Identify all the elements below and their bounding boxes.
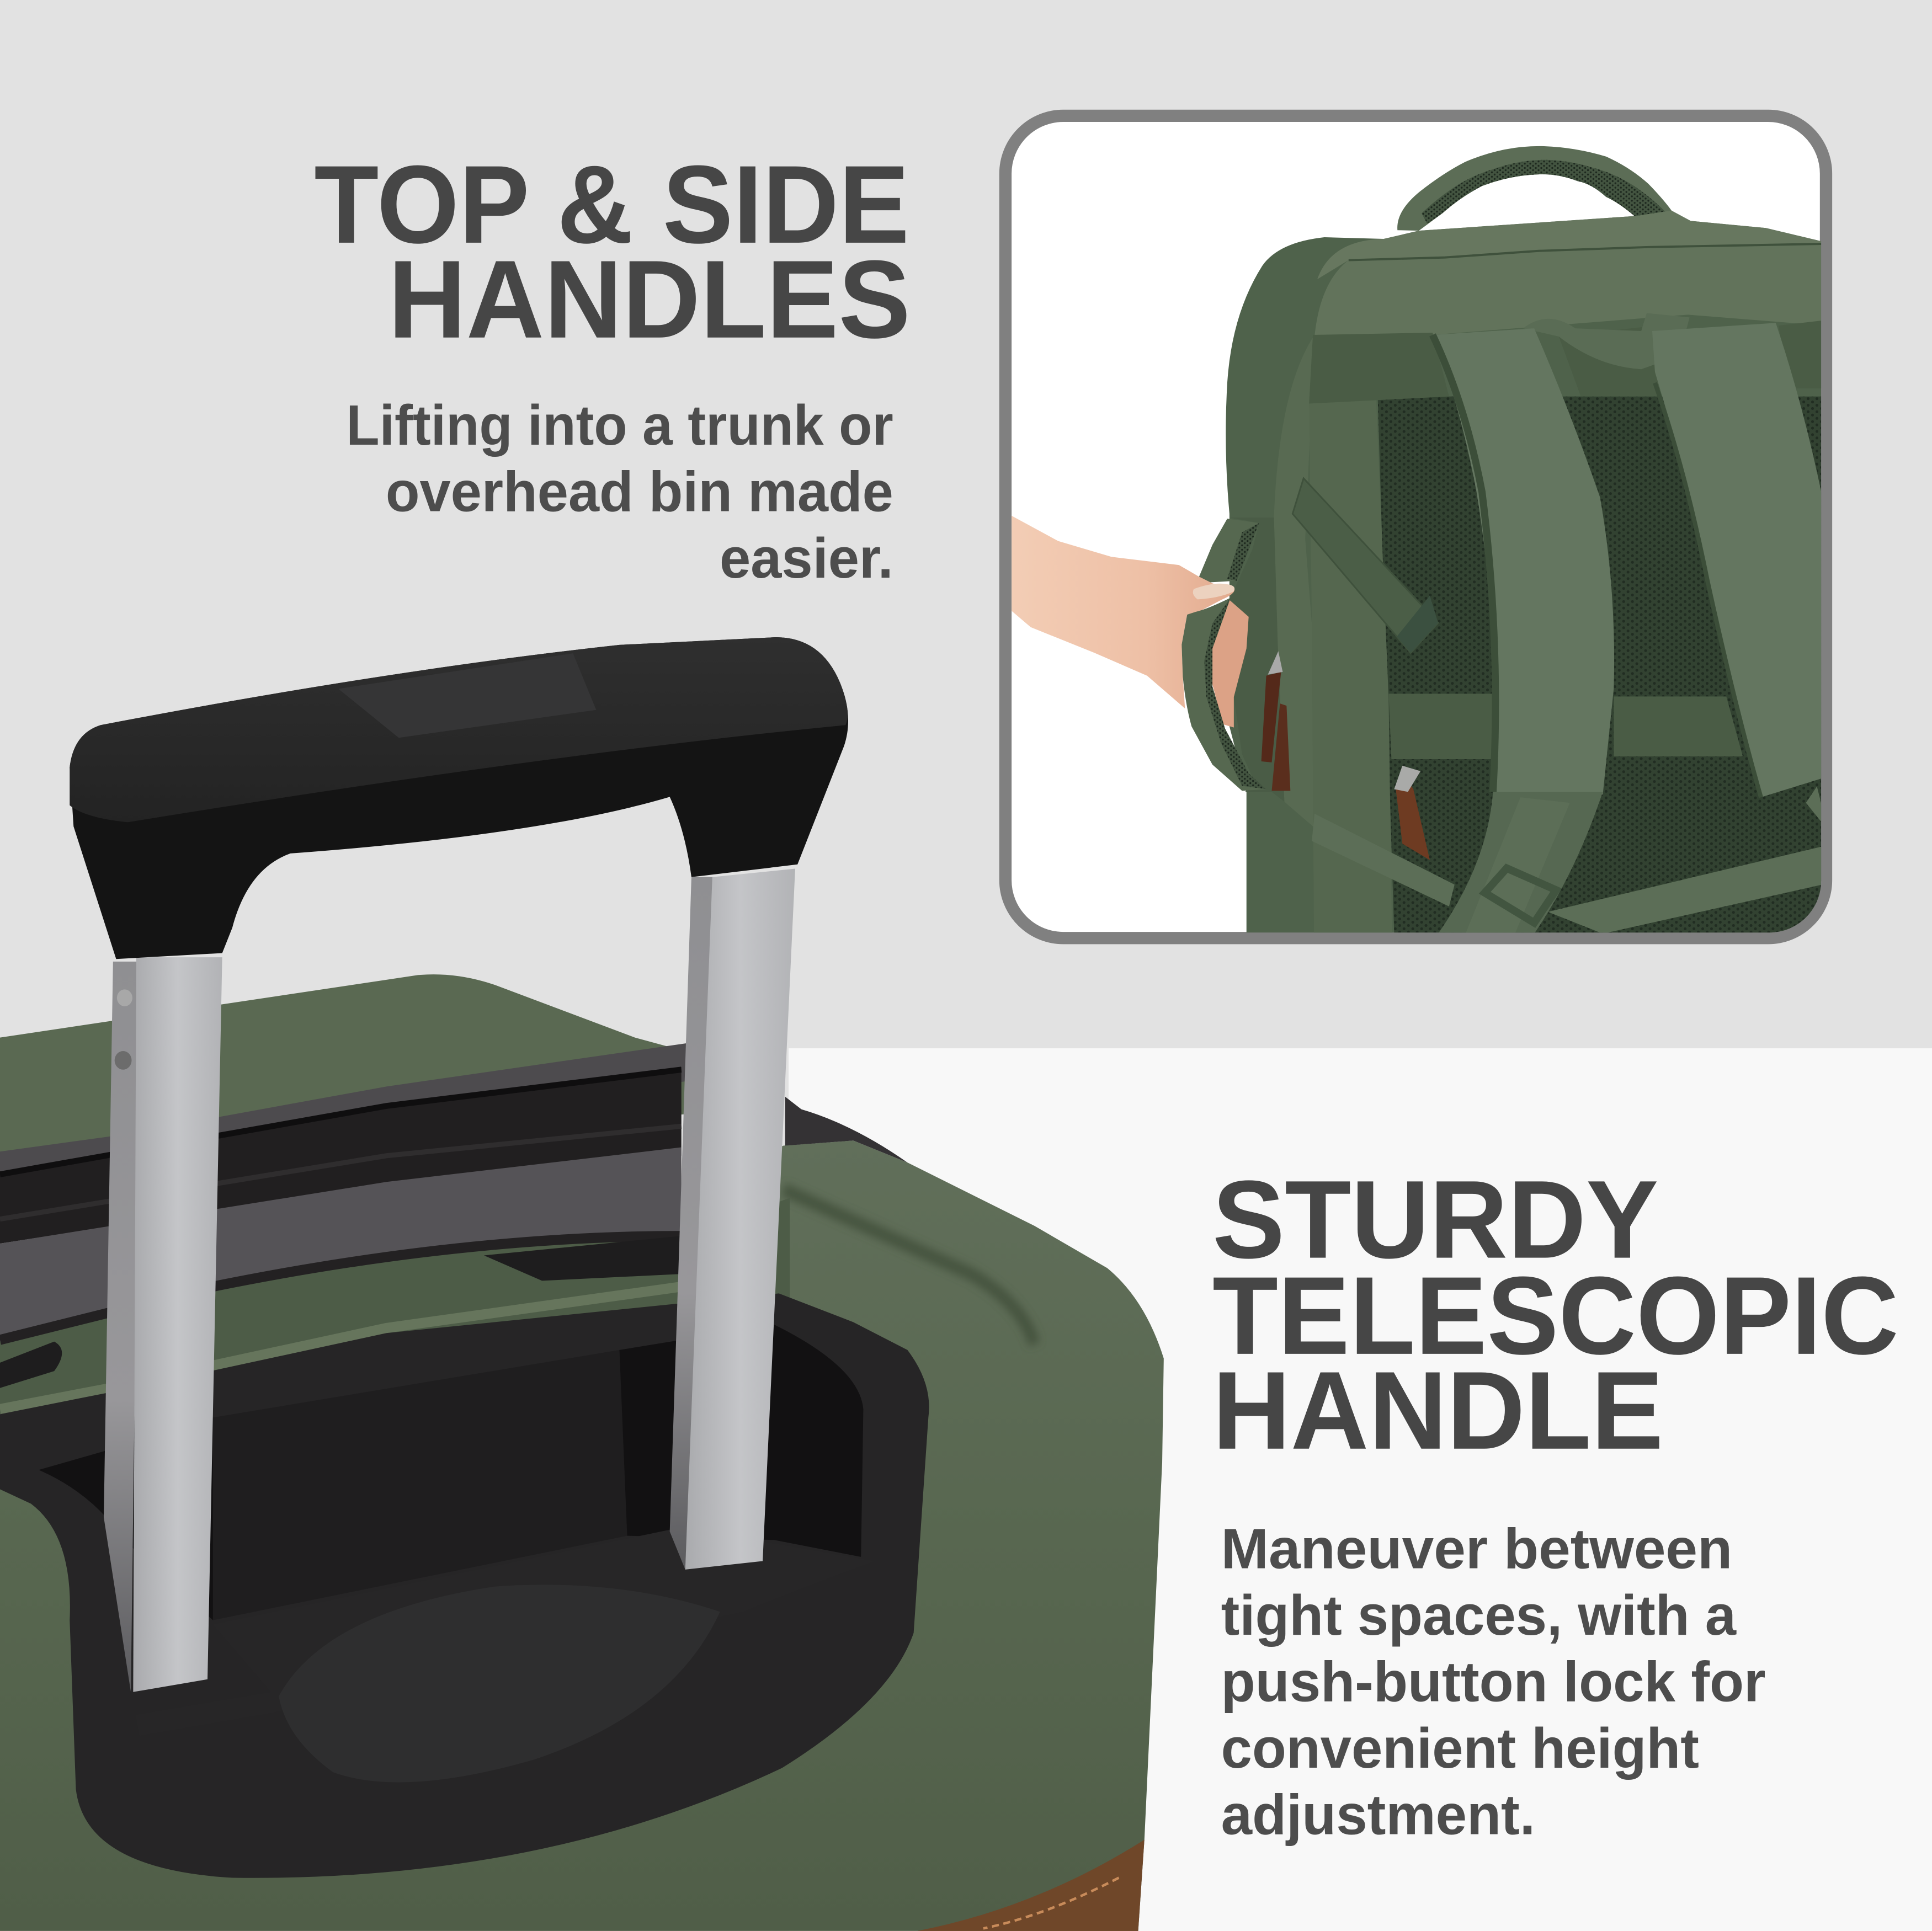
icon: webbing lower band <box>1388 694 1743 759</box>
icon: left shoulder strap <box>1433 328 1614 794</box>
icon: backpack top handle <box>1397 146 1673 231</box>
icon: palm and thumb <box>1011 515 1234 708</box>
text block: top and side handles description <box>346 393 893 590</box>
heading: top and side handles: TOP & SIDE <box>314 142 909 266</box>
icon: suitcase main body <box>0 1140 1164 1931</box>
icon: hand gripping handle <box>1011 515 1249 728</box>
icon: grip top face <box>70 637 848 822</box>
icon: recess rear wall <box>213 1350 627 1620</box>
icon: side zipper pulls <box>1262 651 1290 791</box>
icon: recess dark cavities <box>39 1325 863 1620</box>
icon: push button <box>338 653 596 738</box>
icon: top rim <box>1317 211 1825 279</box>
icon: left aluminium pole <box>104 957 222 1692</box>
text block: telescopic handle description <box>1221 1517 1766 1847</box>
icon: strap foot tabs <box>0 1236 682 1388</box>
icon: brown leather corner <box>918 1840 1145 1931</box>
icon: telescopic handle grip <box>70 637 848 959</box>
text block: top and side handles description: Lifting into a trunk or <box>346 393 893 457</box>
text block: telescopic handle description: adjustment. <box>1221 1783 1535 1847</box>
text block: telescopic handle description: Maneuver between <box>1221 1517 1732 1580</box>
icon: back mesh area <box>1378 397 1825 934</box>
text block: telescopic handle description: tight spaces, with a <box>1221 1583 1737 1647</box>
icon: finger scoop <box>279 1585 720 1783</box>
icon: folded grey strap <box>0 1148 682 1342</box>
heading: sturdy telescopic handle <box>1212 1157 1899 1473</box>
icon: right aluminium pole <box>670 868 795 1570</box>
icon: bag side behind handle <box>1230 518 1284 802</box>
heading: sturdy telescopic handle: STURDY <box>1212 1157 1658 1282</box>
icon: suitcase back lid <box>0 974 697 1156</box>
icon: strap dark edge <box>0 1236 682 1340</box>
text block: top and side handles description: easier. <box>720 526 893 590</box>
icon: side handle lower section <box>1181 598 1266 791</box>
heading: sturdy telescopic handle: TELESCOPIC <box>1212 1253 1899 1378</box>
text block: telescopic handle description: push-button lock for <box>1221 1650 1766 1713</box>
icon: zipper pull, lower <box>1394 766 1430 860</box>
icon: light lip of green floor <box>0 1287 682 1409</box>
icon: body crease <box>784 1189 1035 1344</box>
icon: right shoulder strap <box>1652 323 1822 797</box>
icon: top face <box>1314 244 1825 337</box>
icon: side panel <box>1314 544 1392 932</box>
icon: carry strap <box>1523 313 1690 369</box>
icon: green floor under strap <box>0 1198 790 1414</box>
icon: webbing upper band <box>1309 320 1825 404</box>
icon: side handle upper section <box>1197 519 1259 583</box>
icon: grey rim right of pole <box>785 1097 907 1162</box>
icon: fingers behind handle <box>1202 600 1249 728</box>
background: light lower right area <box>789 1048 1932 1931</box>
icon: diagonal side strap <box>1292 478 1438 653</box>
icon: fingernail <box>1193 584 1234 599</box>
icon: backpack body <box>1226 211 1825 936</box>
panel: backpack photo <box>1005 116 1828 938</box>
icon: lower straps and buckle <box>1438 792 1603 934</box>
text block: top and side handles description: overhead bin made <box>386 460 893 524</box>
photo: suitcase with telescopic handle <box>0 637 1164 1931</box>
icon: zipper grey rim <box>0 1042 697 1177</box>
icon: side fabric strip <box>1274 335 1314 828</box>
heading: top and side handles: HANDLES <box>388 237 911 361</box>
icon: zipper band <box>0 1067 682 1244</box>
icon: recess floor ledge <box>136 1527 875 1736</box>
text block: telescopic handle description: convenient height <box>1221 1716 1699 1780</box>
icon: black handle recess tray <box>0 1293 929 1878</box>
heading: top and side handles <box>314 142 911 361</box>
heading: sturdy telescopic handle: HANDLE <box>1212 1348 1663 1473</box>
